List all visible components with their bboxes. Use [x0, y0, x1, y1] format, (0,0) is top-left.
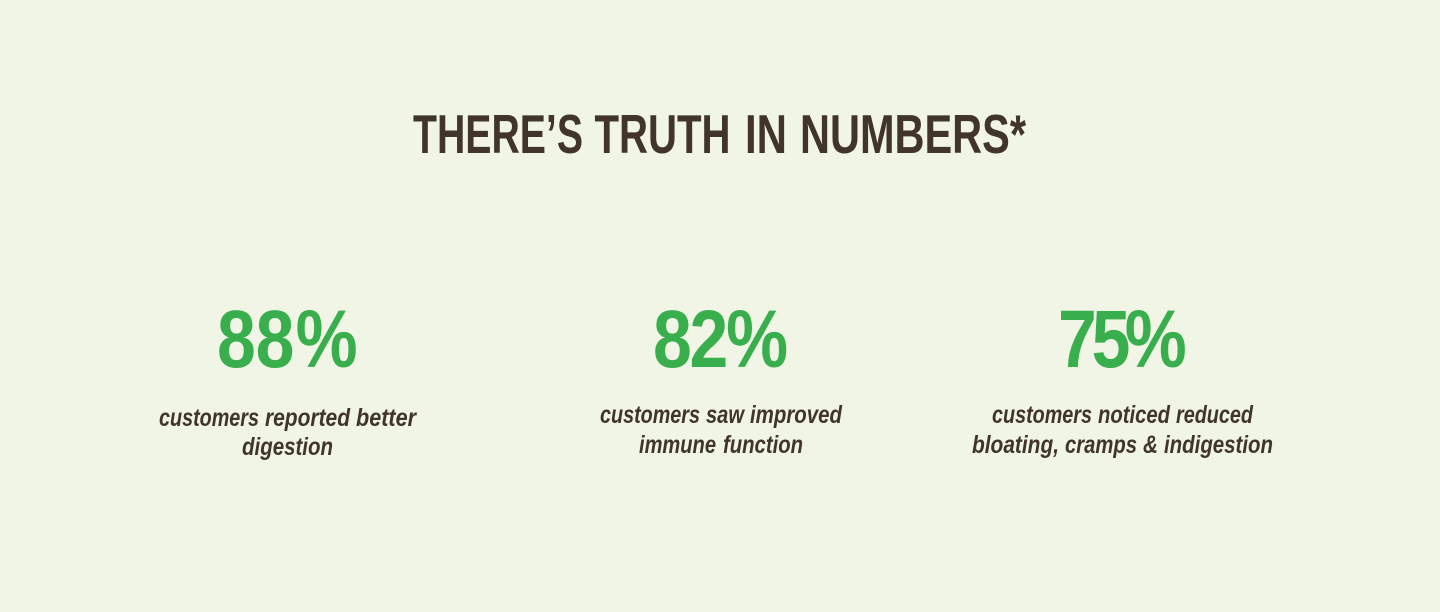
stat description: immune function: saw: [706, 401, 745, 429]
stat description: better digestion: [159, 404, 417, 461]
stat description: immune function: [600, 401, 843, 459]
stat: 75% reduced bloating: [972, 294, 1273, 459]
stat description: reduced bloating: cramps: [1065, 431, 1137, 459]
stat: 82% immune function: [600, 294, 843, 459]
stat description: immune function: immune: [639, 431, 716, 459]
stat number: 75%: 75%: [1058, 294, 1187, 385]
stat description: reduced bloating: indigestion: [1164, 431, 1273, 459]
stat description: reduced bloating: &: [1143, 431, 1158, 459]
stat description: reduced bloating: customers: [992, 401, 1092, 429]
stat description: reduced bloating: bloating,: [972, 431, 1059, 459]
stat description: reduced bloating: noticed: [1098, 401, 1171, 429]
stat description: immune function: improved: [750, 401, 843, 429]
title: THERE’S: [413, 103, 583, 165]
stat description: immune function: function: [723, 431, 803, 459]
stat description: better digestion: better: [356, 404, 417, 432]
stat description: better digestion: customers: [159, 404, 259, 432]
stat description: immune function: customers: [600, 401, 700, 429]
title: [413, 103, 1026, 165]
stat number: 88%: 88%: [217, 294, 358, 385]
stat description: better digestion: reported: [265, 404, 351, 432]
title: TRUTH: [594, 103, 730, 165]
stat description: better digestion: digestion: [242, 433, 333, 461]
title: NUMBERS*: [800, 103, 1026, 165]
title: IN: [745, 103, 787, 165]
stat description: reduced bloating: [972, 401, 1273, 459]
stat number: 82%: 82%: [653, 294, 788, 385]
stat: 88% better digestion: [159, 294, 417, 461]
stat description: reduced bloating: reduced: [1176, 401, 1254, 429]
